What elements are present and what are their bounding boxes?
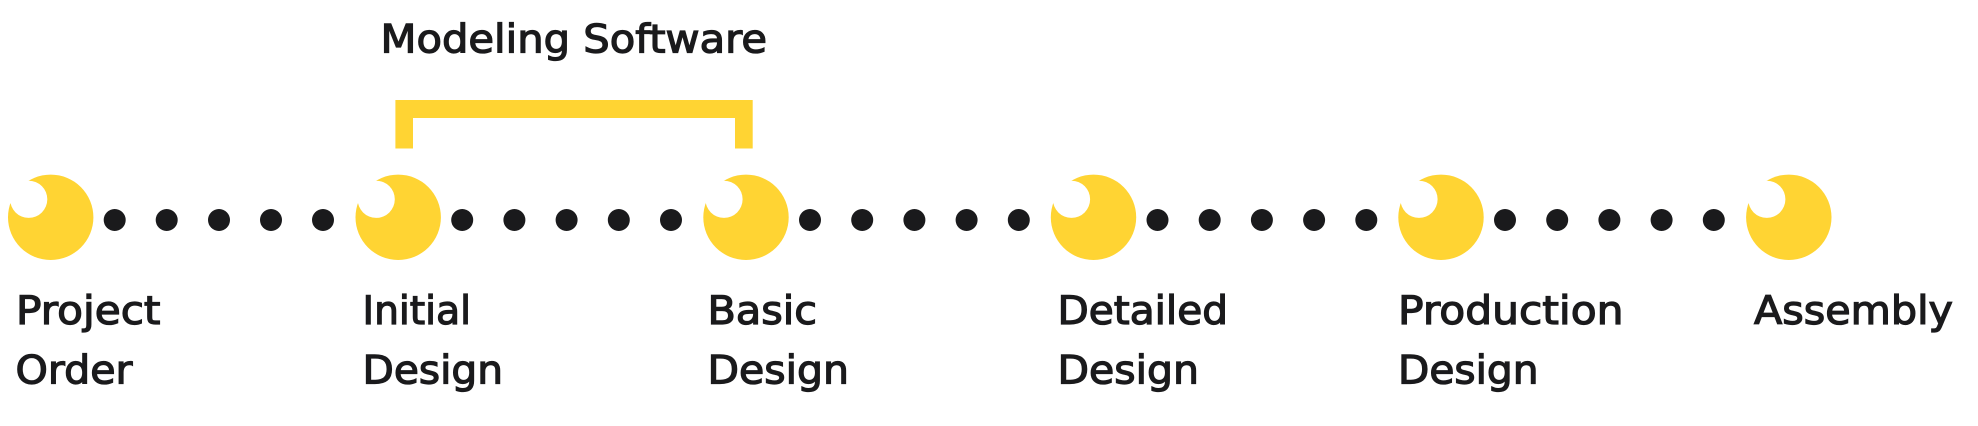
- bracket spanning Initial Design to Basic Design: [395, 100, 753, 148]
- timeline: [8, 175, 1832, 260]
- node: Project Order: [8, 175, 93, 260]
- label: Project Order: Order: [16, 348, 133, 394]
- label: Basic Design: Design: [708, 348, 849, 394]
- dots between Project Order and Initial Design: [104, 209, 334, 231]
- label: Production Design: Production: [1398, 288, 1624, 334]
- dots between Basic Design and Detailed Design: [799, 209, 1030, 231]
- node: Assembly: [1746, 175, 1832, 260]
- label: Basic Design: [708, 288, 849, 394]
- label: Detailed Design: Detailed: [1058, 288, 1228, 334]
- node: Production Design: [1398, 175, 1484, 260]
- label: Production Design: [1398, 288, 1624, 394]
- node: Detailed Design: [1051, 175, 1136, 260]
- label: Basic Design: Basic: [708, 288, 817, 334]
- label: Initial Design: Design: [362, 348, 503, 394]
- label: Project Order: Project: [16, 288, 160, 334]
- label: Detailed Design: [1058, 288, 1228, 394]
- label: Detailed Design: Design: [1058, 348, 1199, 394]
- dots between Initial Design and Basic Design: [451, 209, 682, 231]
- node: Initial Design: [356, 175, 441, 260]
- label: Project Order: [16, 288, 160, 394]
- dots between Detailed Design and Production Design: [1146, 209, 1377, 231]
- label: Initial Design: [362, 288, 503, 394]
- label: Production Design: Design: [1398, 348, 1538, 394]
- label: Initial Design: Initial: [362, 288, 471, 334]
- label: Assembly: Assembly: [1754, 288, 1953, 334]
- heading: Modeling Software: Modeling Software: [380, 16, 767, 62]
- dots between Production Design and Assembly: [1494, 209, 1725, 231]
- node: Basic Design: [703, 175, 789, 260]
